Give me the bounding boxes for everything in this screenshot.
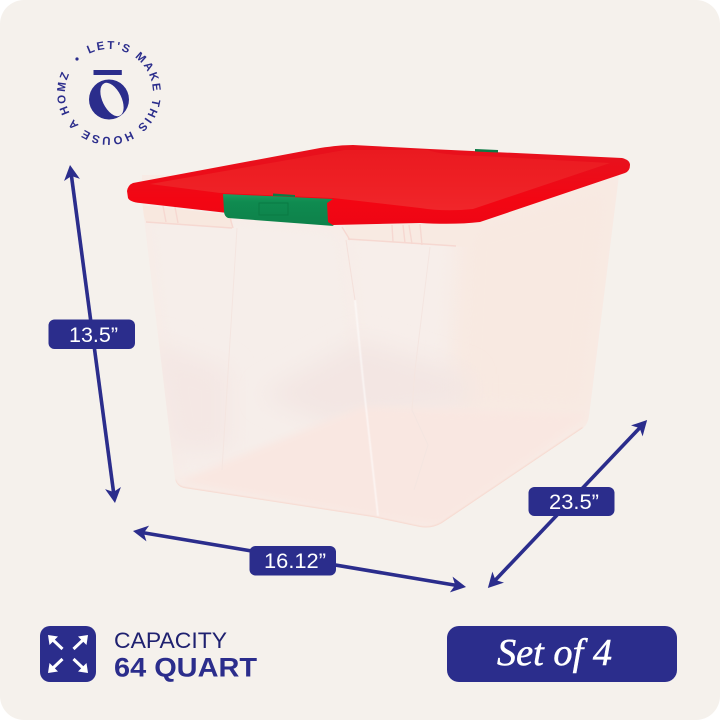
panel fold lines	[222, 228, 430, 456]
badge bar	[94, 70, 122, 75]
badge letter O	[89, 79, 129, 120]
capacity text: CAPACITY	[114, 628, 227, 653]
white corner edge	[355, 300, 378, 516]
box base edge	[175, 428, 583, 528]
set of 4 badge: Set of 4	[497, 632, 612, 674]
width label: 16.12”	[264, 550, 326, 573]
height label	[48, 320, 135, 349]
product: storage box	[127, 145, 630, 540]
width arrow	[139, 532, 460, 586]
front green latch	[223, 194, 334, 226]
lid rim	[127, 145, 630, 225]
logo: round badge	[57, 41, 161, 145]
height arrow	[71, 171, 114, 497]
badge ring text: LET'S MAKE THIS HOUSE A HOMZ	[57, 41, 161, 145]
capacity text	[114, 628, 258, 682]
box floor	[203, 434, 364, 502]
depth arrow	[492, 424, 643, 584]
box rim	[144, 207, 232, 227]
capacity icon	[40, 626, 96, 682]
latch brand mark	[259, 203, 288, 215]
depth label	[528, 487, 614, 516]
capacity text: 64 QUART	[114, 652, 258, 682]
depth label: 23.5”	[549, 491, 599, 514]
badge dot	[75, 57, 79, 61]
rim pink lines	[146, 206, 456, 246]
set of 4 badge	[447, 626, 677, 682]
width label	[250, 546, 336, 576]
lid top surface	[150, 150, 610, 210]
box body	[142, 177, 618, 528]
height label: 13.5”	[69, 324, 118, 347]
box lid	[127, 145, 630, 225]
back green latch	[475, 149, 498, 152]
